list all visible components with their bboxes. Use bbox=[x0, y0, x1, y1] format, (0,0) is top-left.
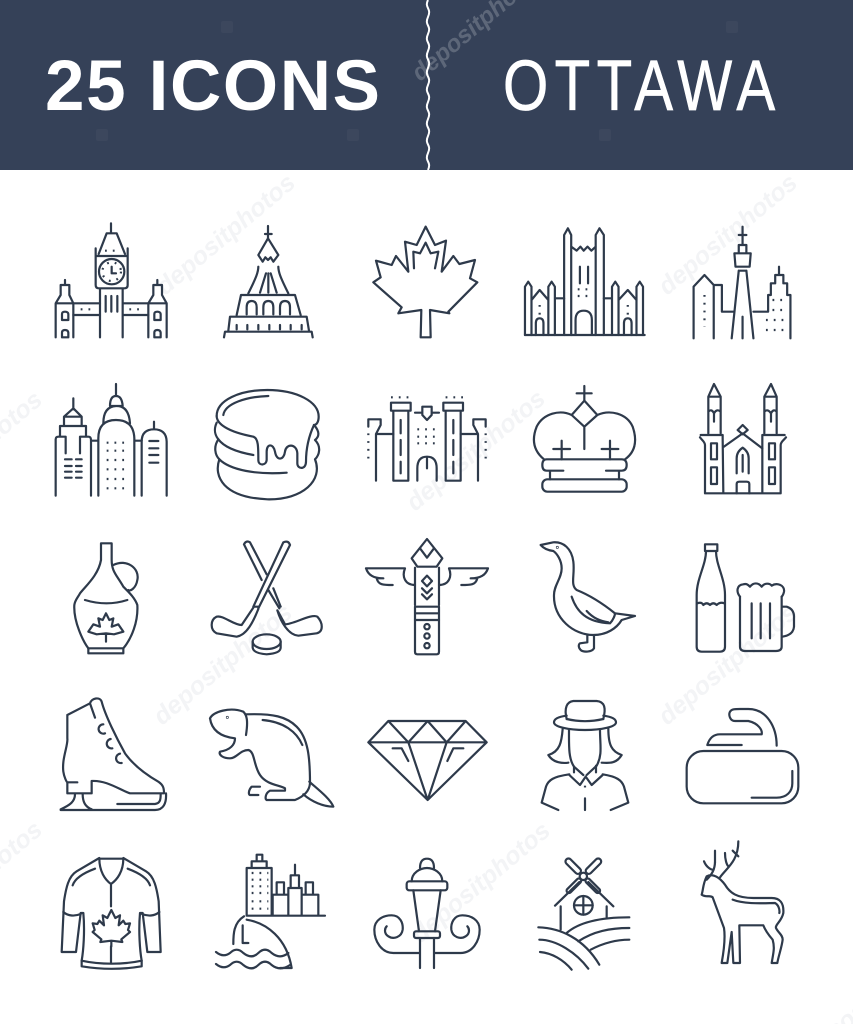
header band bbox=[0, 0, 853, 170]
icon: hockey sticks and puck bbox=[212, 542, 322, 654]
icon: beaver bbox=[210, 710, 333, 807]
icon: deer bbox=[702, 841, 783, 963]
icon: twin-spire church bbox=[700, 384, 786, 493]
icon: castle gate bbox=[368, 397, 486, 481]
icon: woman with hat bbox=[542, 701, 628, 810]
icon: goose bbox=[541, 542, 635, 652]
icon: curling stone bbox=[687, 709, 798, 803]
watermark text: depositphotos bbox=[401, 384, 551, 517]
icon: hockey jersey bbox=[62, 858, 161, 969]
icon: university college tower bbox=[525, 228, 645, 335]
title: 25 icons: 25 ICONS bbox=[45, 47, 380, 126]
icon: totem pole bbox=[366, 539, 488, 654]
icon: royal crown bbox=[534, 386, 635, 492]
watermark text: depositphotos bbox=[151, 168, 301, 301]
icon: ice skate bbox=[61, 698, 166, 810]
watermark text: depositphotos bbox=[148, 598, 298, 731]
icon: beer bottle and mug bbox=[697, 544, 794, 652]
icon: maple leaf bbox=[373, 227, 477, 337]
icon: windmill and fields bbox=[538, 857, 629, 970]
icon: domed library bbox=[224, 226, 313, 337]
icon: street lamp bbox=[374, 859, 480, 968]
icon: maple syrup jug bbox=[74, 543, 138, 653]
icon: diamond bbox=[368, 721, 487, 800]
icon: city skyscrapers bbox=[56, 384, 167, 496]
watermark text: depositphotos bbox=[653, 598, 803, 731]
icon: Parliament clock tower bbox=[56, 223, 167, 337]
icon: skyline with tower bbox=[694, 227, 790, 338]
icon: city above waterfall bbox=[216, 855, 325, 968]
title: Ottawa: OTTAWA bbox=[503, 45, 776, 125]
icon: pancakes with syrup bbox=[215, 390, 319, 499]
watermark text: depositphotos bbox=[406, 816, 556, 949]
watermark text: depositphotos bbox=[653, 168, 803, 301]
